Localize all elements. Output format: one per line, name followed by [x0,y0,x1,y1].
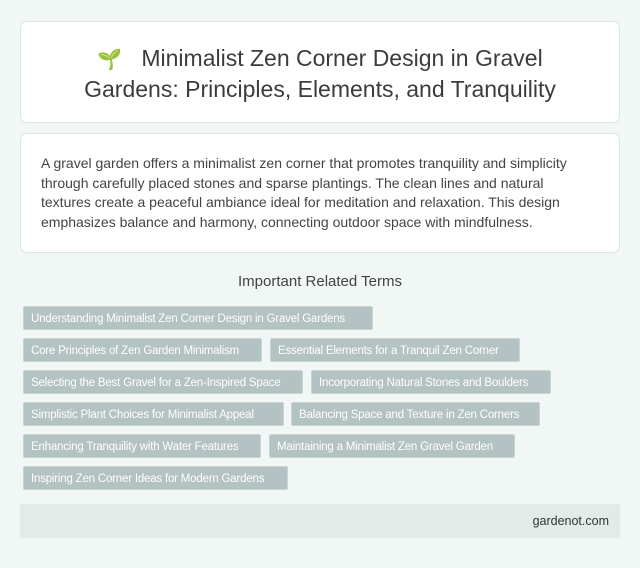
title: 🌱 Minimalist Zen Corner Design in Gravel [97,45,543,71]
tag 9 [269,434,515,458]
tag 6 [23,402,284,426]
description text [41,155,567,230]
title [84,45,556,102]
tag 2 [23,338,262,362]
tag 3 [270,338,520,362]
tag 1: Understanding Minimalist Zen Corner Design in Gravel Gardens [31,313,345,325]
description text: emphasizes balance and harmony, connecting outdoor space with mindfulness. [41,214,533,230]
tag 4: Selecting the Best Gravel for a Zen-Inspired Space [31,377,281,389]
title: Gardens: Principles, Elements, and Tranquility [84,76,556,102]
tag 5: Incorporating Natural Stones and Boulders [319,377,528,389]
tag 10: Inspiring Zen Corner Ideas for Modern Gardens [31,473,264,485]
footer [20,504,620,538]
description text: A gravel garden offers a minimalist zen corner that promotes tranquility and simplicity [41,155,567,171]
tag 7 [291,402,540,426]
tag 7: Balancing Space and Texture in Zen Corners [299,409,519,421]
tag 6: Simplistic Plant Choices for Minimalist Appeal [31,409,254,421]
description text: textures create a peaceful ambiance ideal for meditation and relaxation. This design [41,194,560,210]
description card [20,133,620,253]
tag 5 [311,370,551,394]
tag 4 [23,370,303,394]
tag 9: Maintaining a Minimalist Zen Gravel Garden [277,441,493,453]
tag 8 [23,434,261,458]
tag 3: Essential Elements for a Tranquil Zen Corner [278,345,499,357]
footer source: gardenot.com [533,514,609,528]
tag 2: Core Principles of Zen Garden Minimalism [31,345,239,357]
section heading: Important Related Terms [238,273,402,290]
tag 10 [23,466,288,490]
description text: through carefully placed stones and sparse plantings. The clean lines and natural [41,174,544,190]
tag 8: Enhancing Tranquility with Water Features [31,441,238,453]
header card [20,21,620,123]
tag 1 [23,306,373,330]
